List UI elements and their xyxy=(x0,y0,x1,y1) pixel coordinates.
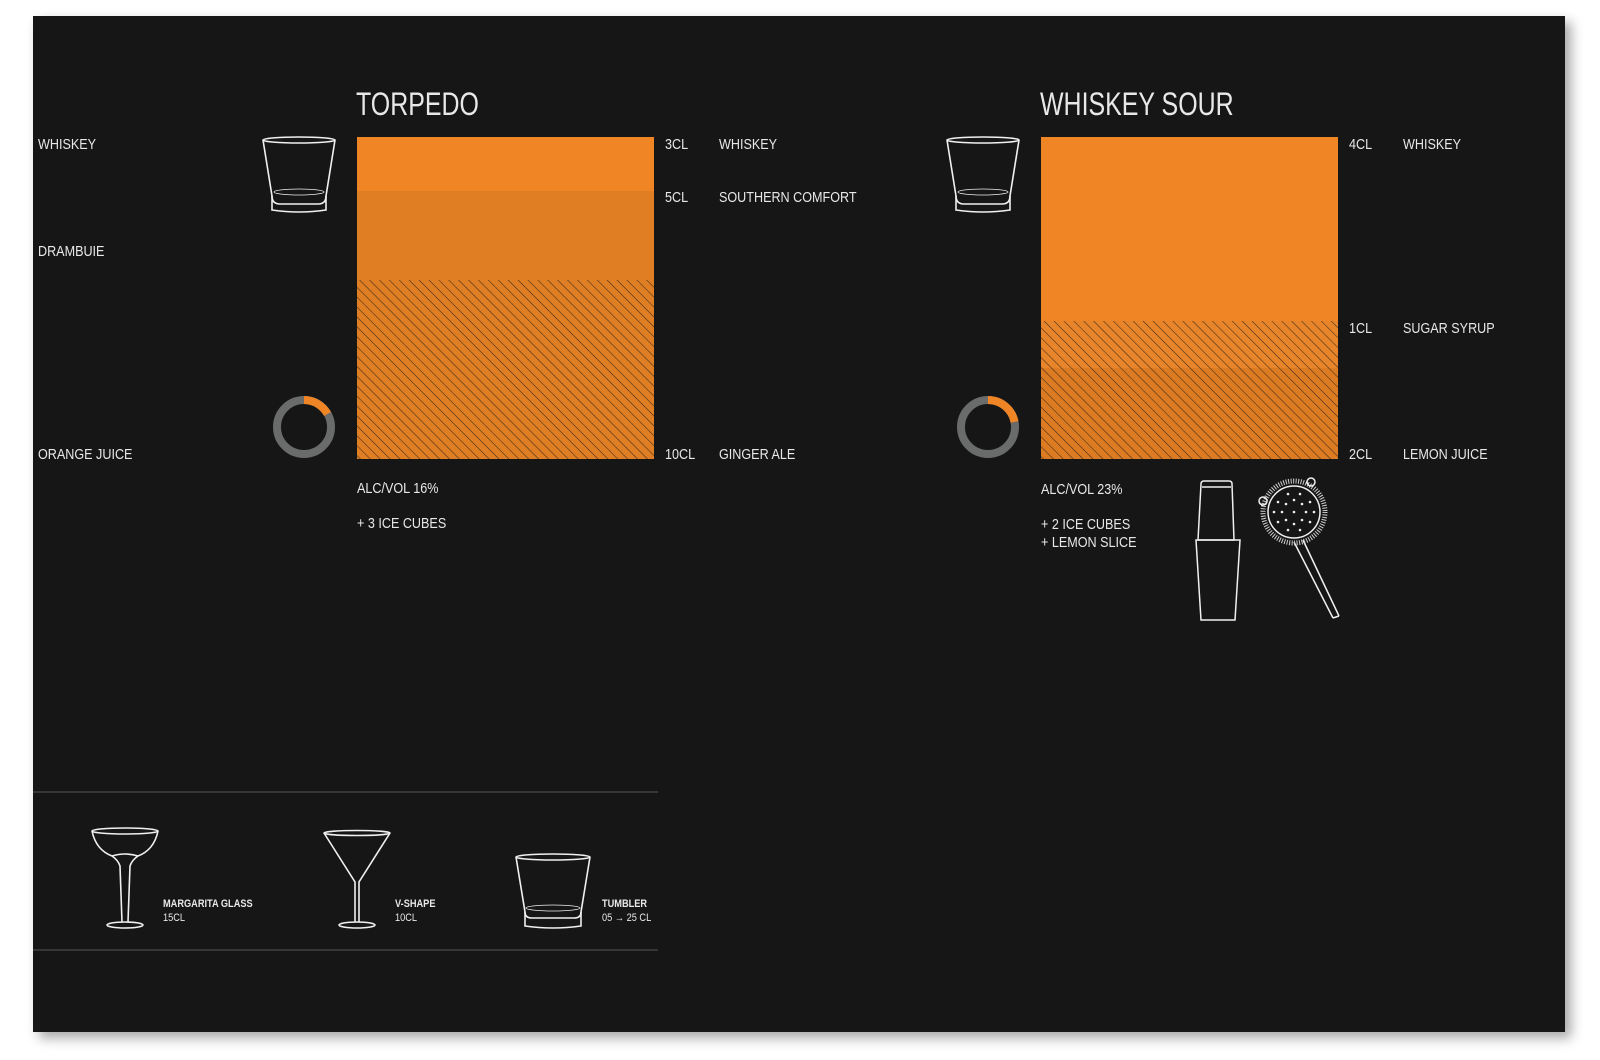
notes: torpedo: ALC/VOL 16% xyxy=(357,479,438,496)
amounts and ingredients right: SOUTHERN COMFORT xyxy=(719,188,857,205)
icon: shaker xyxy=(1196,481,1240,620)
left ingredient labels: ORANGE JUICE xyxy=(38,445,132,462)
icon: v-shape glass xyxy=(324,830,390,928)
amounts and ingredients right: 3CL xyxy=(665,135,688,152)
icon: tumbler glass xyxy=(947,137,1019,212)
icon: tumbler xyxy=(516,854,590,928)
donut: alc 23% xyxy=(961,400,1015,454)
amounts and ingredients right: GINGER ALE xyxy=(719,445,795,462)
amounts and ingredients right: 2CL xyxy=(1349,445,1372,462)
notes: torpedo: + 3 ICE CUBES xyxy=(357,514,446,531)
stacked bar: torpedo xyxy=(357,137,654,459)
amounts and ingredients right: LEMON JUICE xyxy=(1403,445,1488,462)
amounts and ingredients right: 5CL xyxy=(665,188,688,205)
left ingredient labels: WHISKEY xyxy=(38,135,96,152)
notes: whiskey sour: + LEMON SLICE xyxy=(1041,533,1137,550)
title: torpedo: TORPEDO xyxy=(356,87,479,123)
stacked bar: whiskey sour xyxy=(1041,137,1338,459)
notes: whiskey sour: ALC/VOL 23% xyxy=(1041,480,1122,497)
label: v-shape xyxy=(395,898,436,924)
donut: alc 16% xyxy=(277,400,331,454)
notes: torpedo xyxy=(357,479,446,531)
amounts and ingredients right: WHISKEY xyxy=(719,135,777,152)
label: tumbler xyxy=(602,898,652,924)
label: v-shape: 10CL xyxy=(395,912,417,924)
label: v-shape: V-SHAPE xyxy=(395,898,436,910)
left ingredient labels: DRAMBUIE xyxy=(38,242,104,259)
panel: glass legend xyxy=(33,792,658,950)
amounts and ingredients right: SUGAR SYRUP xyxy=(1403,319,1495,336)
left ingredient labels xyxy=(38,135,132,462)
title: whiskey sour: WHISKEY SOUR xyxy=(1040,87,1234,123)
amounts and ingredients right: WHISKEY xyxy=(1403,135,1461,152)
amounts and ingredients right xyxy=(1349,135,1495,462)
label: tumbler: 05 → 25 CL xyxy=(602,912,652,924)
notes: whiskey sour xyxy=(1041,480,1137,550)
panel: whiskey sour xyxy=(947,87,1495,620)
amounts and ingredients right: 10CL xyxy=(665,445,695,462)
panel: torpedo xyxy=(38,87,857,531)
label: margarita glass xyxy=(163,898,253,924)
notes: whiskey sour: + 2 ICE CUBES xyxy=(1041,515,1130,532)
icon: margarita glass xyxy=(92,828,158,928)
amounts and ingredients right xyxy=(665,135,857,462)
icon: tumbler glass xyxy=(263,137,335,212)
label: margarita glass: MARGARITA GLASS xyxy=(163,898,253,910)
label: margarita glass: 15CL xyxy=(163,912,185,924)
amounts and ingredients right: 4CL xyxy=(1349,135,1372,152)
label: tumbler: TUMBLER xyxy=(602,898,648,910)
amounts and ingredients right: 1CL xyxy=(1349,319,1372,336)
icon: strainer xyxy=(1259,478,1339,618)
